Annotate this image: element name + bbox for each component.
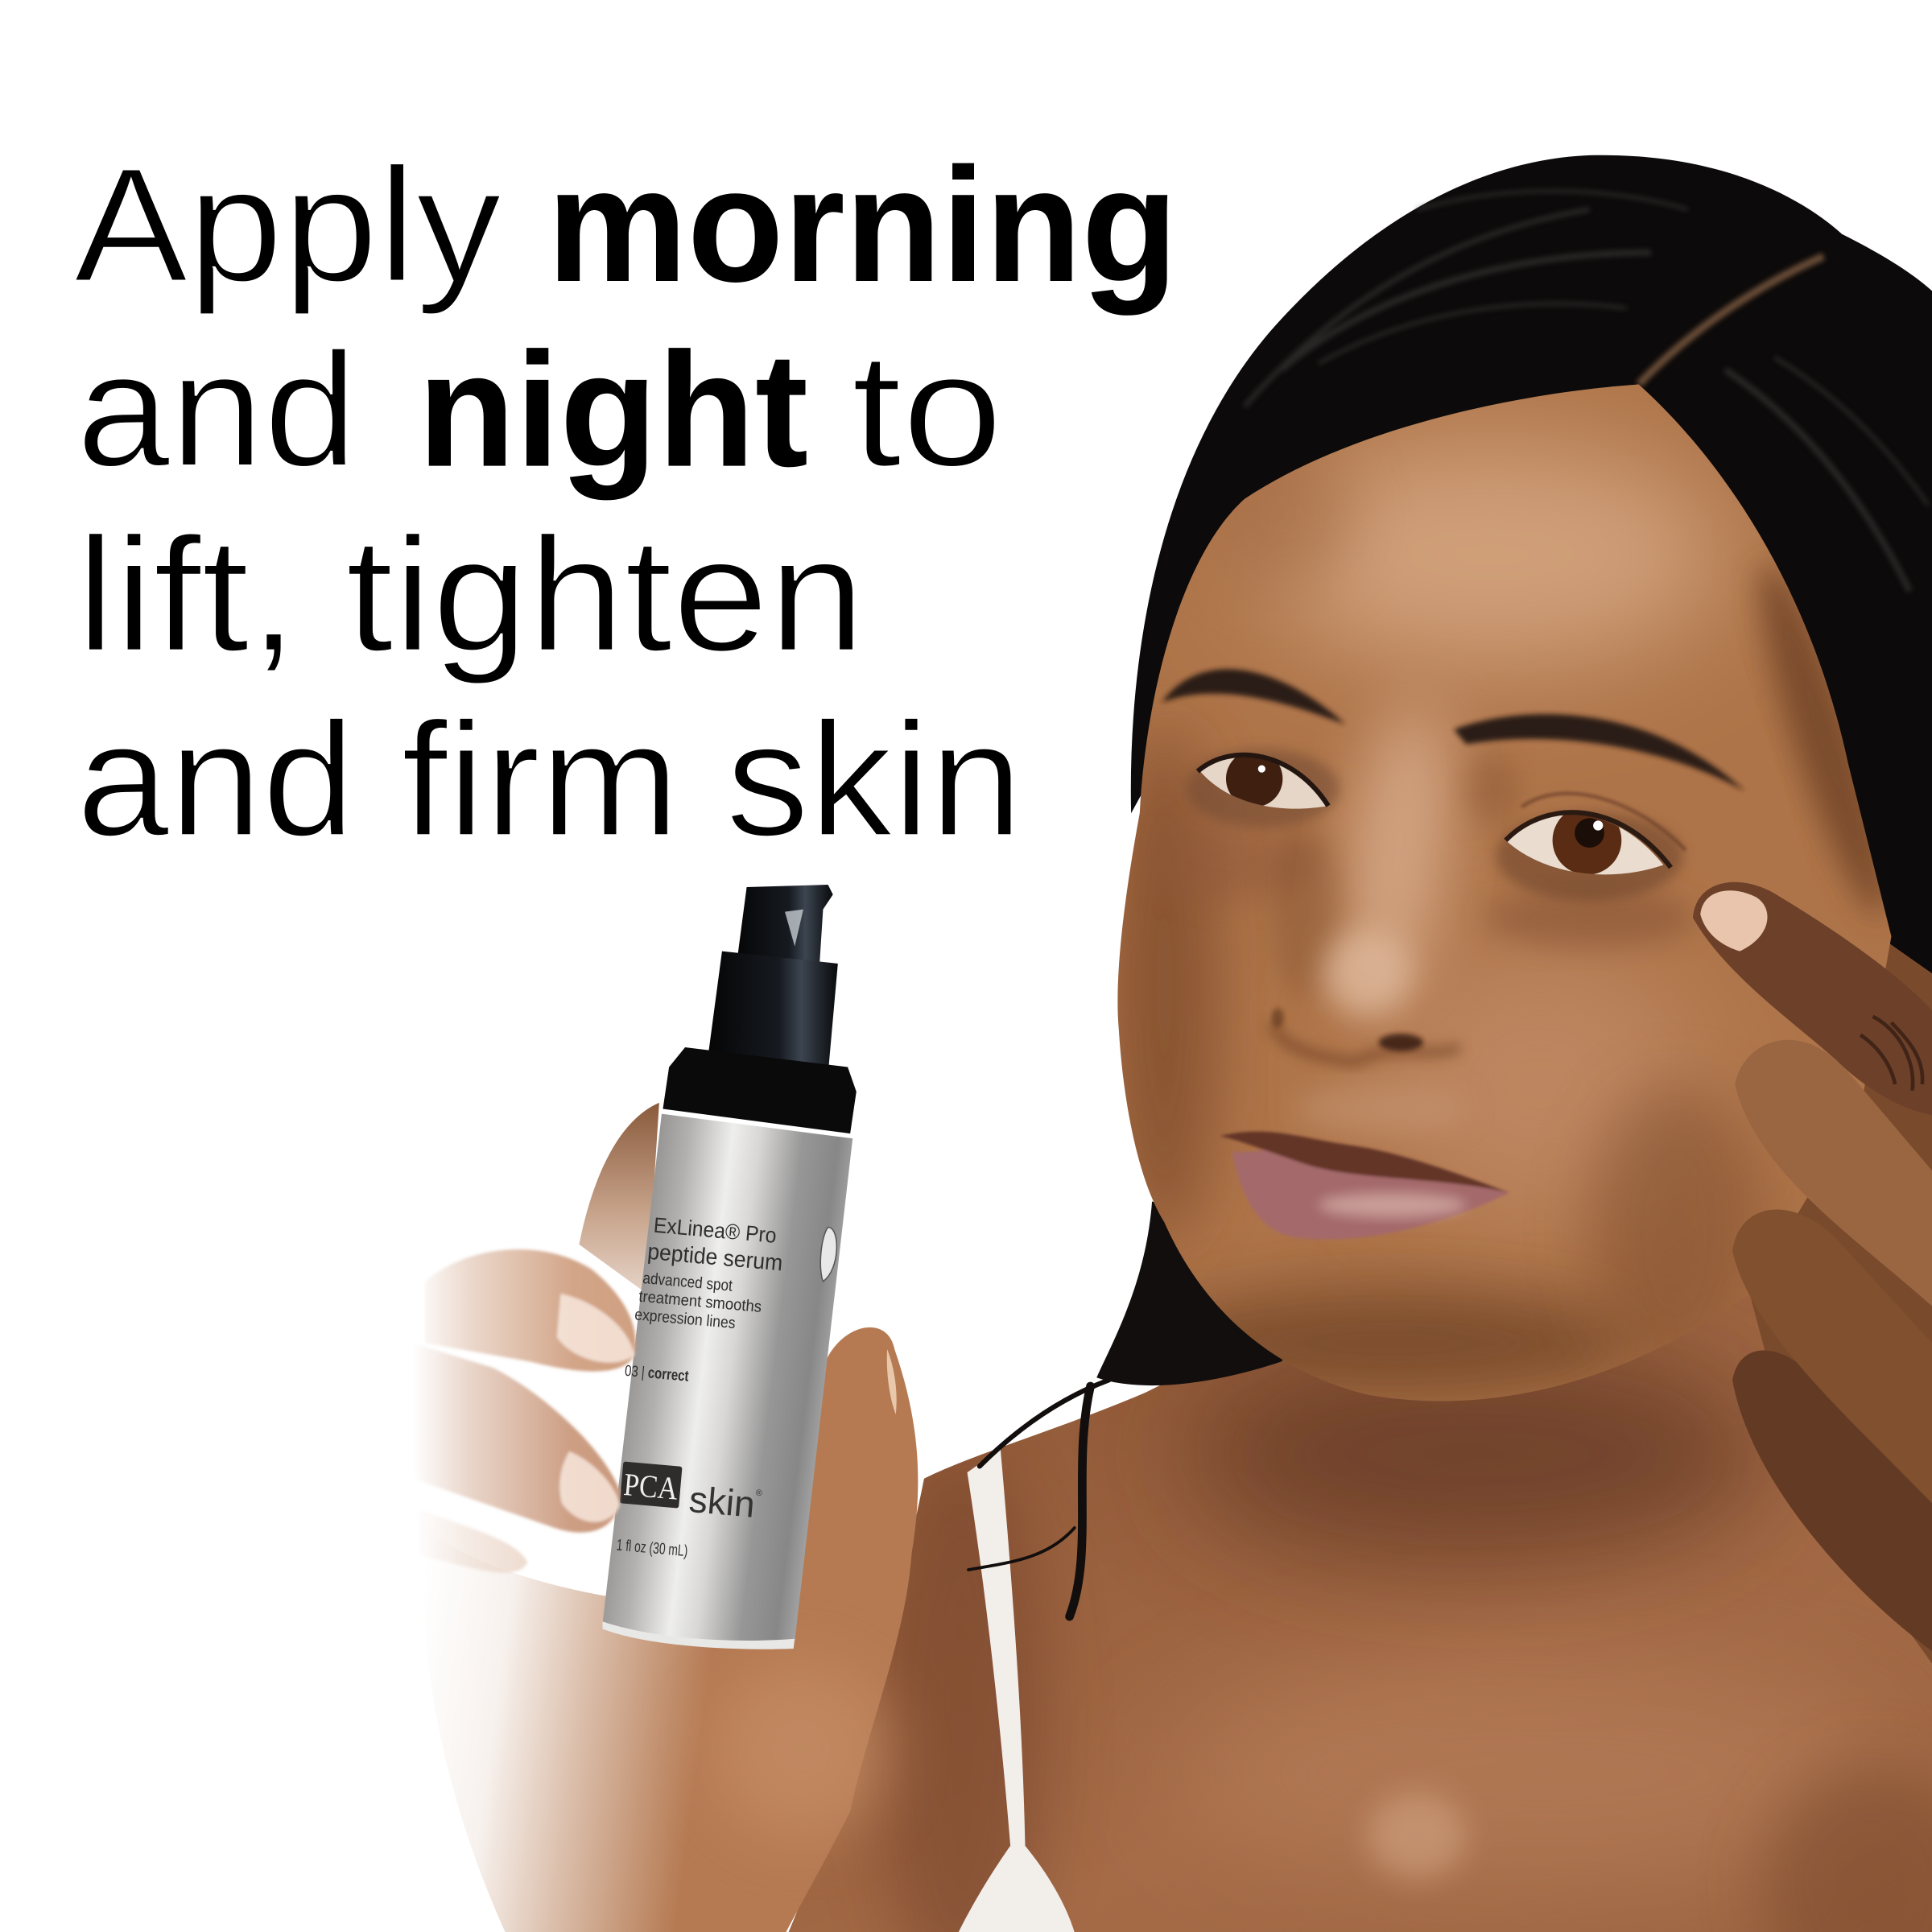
hair <box>968 155 1932 1616</box>
step label: 03 | correct <box>624 1363 690 1385</box>
ring finger <box>419 1509 527 1572</box>
index finger <box>425 1249 636 1372</box>
PCA logo <box>619 1461 764 1526</box>
headline line 2: night <box>418 319 808 501</box>
hand holding bottle: fingers in front <box>413 1249 636 1572</box>
headline <box>74 134 1178 870</box>
bottle label <box>624 1212 786 1393</box>
eyelid crease <box>1521 794 1686 850</box>
headline line 2: and <box>76 319 357 501</box>
serum bottle <box>602 885 857 1649</box>
left eyebrow <box>1162 669 1345 724</box>
right hand fingers <box>1693 882 1932 1651</box>
bottle window <box>820 1227 836 1282</box>
nose <box>1272 931 1460 1062</box>
middle fingernail <box>559 1451 620 1522</box>
thumb nail <box>887 1349 897 1414</box>
hair sheen <box>1245 191 1928 592</box>
skin behind fingers <box>1749 862 1932 1663</box>
headline line 2 <box>76 319 1003 501</box>
face <box>1113 385 1909 1401</box>
right eye <box>1496 794 1686 901</box>
middle finger <box>1735 1040 1932 1306</box>
index fingernail <box>557 1294 634 1363</box>
ring finger <box>1732 1209 1932 1503</box>
headline line 4: and firm skin <box>76 688 1022 870</box>
PCA logo: skin <box>687 1478 757 1525</box>
description <box>634 1269 764 1335</box>
description: expression lines <box>634 1306 736 1332</box>
hand holding bottle: palm and thumb <box>394 1103 918 1932</box>
fingernail <box>1700 890 1768 952</box>
right eyebrow <box>1454 714 1744 791</box>
bottle size text: 1 fl oz (30 mL) <box>616 1537 688 1560</box>
bottle metal body <box>602 1114 852 1645</box>
headline line 3: lift, tighten <box>76 503 865 685</box>
PCA logo: PCA <box>622 1467 679 1507</box>
bottle base rim <box>602 1621 795 1649</box>
headline line 2: to <box>852 319 1003 501</box>
product name: ExLinea® Pro <box>653 1213 778 1248</box>
pinky finger <box>1732 1351 1932 1651</box>
left eye <box>1187 749 1340 828</box>
finger knuckle wrinkles <box>1860 1017 1922 1091</box>
eyebrows <box>1162 669 1744 791</box>
lips <box>1220 1132 1509 1240</box>
pump highlight <box>785 910 803 947</box>
bottle cap ring <box>663 1047 857 1133</box>
headline line 1 <box>74 134 1178 316</box>
headline line 1: morning <box>547 134 1178 316</box>
white top strap <box>959 1449 1075 1932</box>
PCA logo: ® <box>755 1488 762 1498</box>
woman portrait <box>789 155 1932 1932</box>
body: neck, shoulder and chest <box>789 1282 1932 1932</box>
headline line 1: Apply <box>74 134 502 316</box>
index finger <box>1693 882 1932 1115</box>
middle finger <box>413 1343 620 1533</box>
description: treatment smooths <box>638 1288 762 1316</box>
bottle pump collar <box>708 952 838 1075</box>
description: advanced spot <box>642 1269 733 1295</box>
loose strands on neck <box>968 1201 1306 1616</box>
hair parting <box>1639 256 1823 385</box>
product type: peptide serum <box>646 1238 784 1275</box>
bottle pump head <box>734 885 833 985</box>
